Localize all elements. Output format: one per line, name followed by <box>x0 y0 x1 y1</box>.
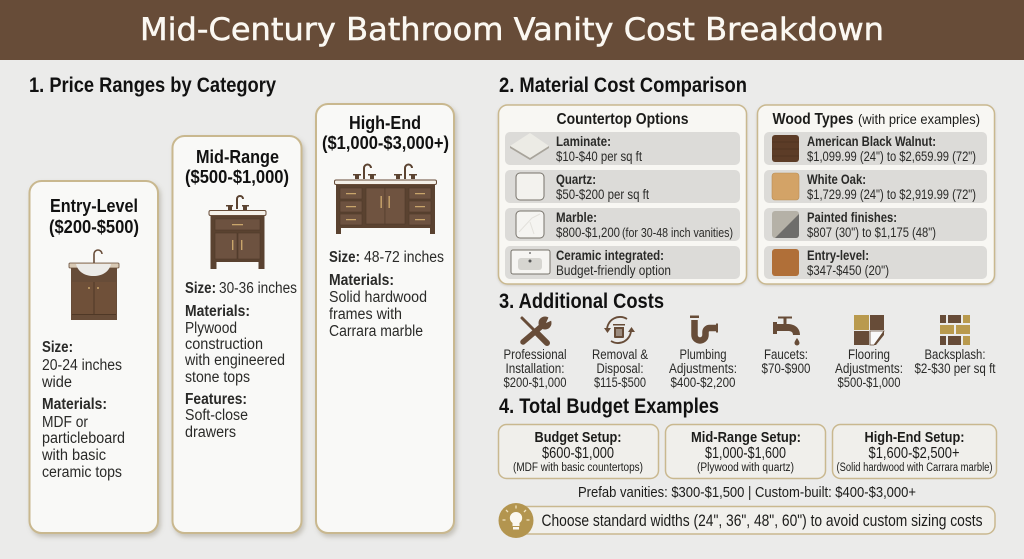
panel: budget setup: $600-$1,000 <box>542 445 614 462</box>
mid-range details: 30-36 inches <box>219 280 297 297</box>
entry-level heading <box>49 196 139 237</box>
panel: mid-range setup <box>666 424 826 478</box>
mid-range details: Plywood <box>185 320 237 337</box>
label: backsplash: $2-$30 per sq ft <box>914 361 996 376</box>
additional cost: plumbing adjustments <box>669 316 737 390</box>
label: flooring: $500-$1,000 <box>838 375 900 390</box>
mid-range details: Features: <box>185 391 247 408</box>
high-end heading <box>322 113 449 153</box>
high-end details: 48-72 inches <box>364 249 444 266</box>
panel: mid-range card <box>172 136 302 533</box>
panel: budget setup: (MDF with basic countertops) <box>513 462 643 474</box>
high-end details: frames with <box>329 306 402 323</box>
icon: floor tiles <box>854 315 884 345</box>
wood types heading: (with price examples) <box>858 111 980 127</box>
row: american black walnut <box>764 132 987 165</box>
mid-range heading <box>185 147 289 187</box>
high-end details <box>329 249 444 340</box>
swatch: walnut <box>772 135 799 162</box>
label: plumbing: Adjustments: <box>669 361 737 376</box>
high-end details: Carrara marble <box>329 323 423 340</box>
row: painted finishes <box>764 208 987 241</box>
section heading: total budget examples: 4. Total Budget Examples <box>499 395 719 418</box>
header banner <box>0 0 1024 60</box>
label: plumbing: Plumbing <box>680 347 726 362</box>
mid-range details: with engineered <box>184 352 285 369</box>
row: marble: Marble: <box>556 210 597 225</box>
mid-range details: Size: <box>185 280 216 297</box>
row: white oak: $1,729.99 (24") to $2,919.99 (72") <box>807 187 976 202</box>
row: laminate: $10-$40 per sq ft <box>556 149 642 164</box>
icon: faucet <box>773 316 800 346</box>
label: plumbing: $400-$2,200 <box>670 375 736 390</box>
swatch: painted <box>772 211 799 238</box>
label: plumbing <box>669 347 737 390</box>
icon: recycling trash bin <box>604 317 635 343</box>
panel: high-end setup: $1,600-$2,500+ <box>868 445 960 462</box>
icon: mid-range vanity <box>209 196 266 269</box>
label: faucets <box>762 347 810 376</box>
swatch: laminate <box>510 133 549 160</box>
label: installation: Professional <box>504 347 566 362</box>
panel: budget setup: Budget Setup: <box>534 429 622 446</box>
icon: double vanity <box>334 165 436 234</box>
additional cost: flooring adjustments <box>835 315 903 390</box>
label: backsplash: Backsplash: <box>924 347 986 362</box>
label: installation <box>504 347 566 390</box>
panel: budget setup <box>498 424 658 478</box>
icon: drain pipe <box>690 316 718 340</box>
countertop heading: Countertop Options <box>556 111 689 128</box>
high-end details: Solid hardwood <box>329 289 427 306</box>
row: marble: $800-$1,200 <box>556 225 620 240</box>
wood types heading <box>772 111 980 128</box>
row: quartz: Quartz: <box>556 172 596 187</box>
panel: mid-range setup: $1,000-$1,600 <box>705 445 786 462</box>
row: painted finishes: $807 (30") to $1,175 (48") <box>807 225 936 240</box>
row: entry-level wood: $347-$450 (20") <box>807 263 889 278</box>
additional cost: faucets <box>762 316 810 376</box>
entry-level details: MDF or <box>42 414 88 431</box>
icon: small vanity with basin <box>69 250 119 320</box>
high-end heading: High-End <box>349 113 421 133</box>
panel: entry-level card <box>30 181 158 533</box>
high-end details: Materials: <box>329 272 394 289</box>
high-end heading: ($1,000-$3,000+) <box>322 133 449 153</box>
row: quartz: $50-$200 per sq ft <box>556 187 649 202</box>
swatch: entry-level <box>772 249 799 276</box>
panel: high-end setup: High-End Setup: <box>864 429 964 446</box>
label: faucets: Faucets: <box>764 347 808 362</box>
swatch: ceramic <box>511 250 550 274</box>
row: ceramic integrated <box>505 246 740 279</box>
label: backsplash <box>914 347 996 376</box>
mid-range details: Materials: <box>185 303 250 320</box>
row: laminate: Laminate: <box>556 134 611 149</box>
row: ceramic integrated: Ceramic integrated: <box>556 248 664 263</box>
label: installation: Installation: <box>506 361 564 376</box>
row: entry-level wood <box>764 246 987 279</box>
section heading: price ranges: 1. Price Ranges by Category <box>29 74 276 97</box>
panel: wood types <box>758 105 994 284</box>
label: installation: $200-$1,000 <box>504 375 566 390</box>
swatch: white oak <box>772 173 799 200</box>
entry-level details: particleboard <box>42 430 125 447</box>
label: flooring: Adjustments: <box>835 361 903 376</box>
prefab versus custom note: Prefab vanities: $300-$1,500 | Custom-built: $400-$3,000+ <box>578 484 916 501</box>
section heading: additional costs: 3. Additional Costs <box>499 290 664 313</box>
swatch: quartz <box>516 173 544 200</box>
label: removal <box>592 347 648 390</box>
label: flooring <box>835 347 903 390</box>
entry-level details: 20-24 inches <box>42 357 122 374</box>
row: marble <box>505 208 740 241</box>
entry-level details <box>41 339 125 481</box>
label: flooring: Flooring <box>848 347 890 362</box>
mid-range details: drawers <box>185 424 236 441</box>
entry-level details: with basic <box>41 447 106 464</box>
mid-range heading: ($500-$1,000) <box>185 167 289 187</box>
mid-range details: Soft-close <box>185 407 248 424</box>
panel: countertop options <box>498 105 746 284</box>
entry-level heading: Entry-Level <box>50 196 138 216</box>
mid-range heading: Mid-Range <box>196 147 279 167</box>
mid-range details <box>184 280 297 441</box>
panel: high-end setup <box>832 424 996 478</box>
title: Mid-Century Bathroom Vanity Cost Breakdown <box>140 12 884 48</box>
entry-level details: Materials: <box>42 396 107 413</box>
panel: mid-range setup: (Plywood with quartz) <box>697 462 794 474</box>
row: white oak: White Oak: <box>807 172 866 187</box>
row: entry-level wood: Entry-level: <box>807 248 869 263</box>
section heading: material cost comparison: 2. Material Cost Comparison <box>499 74 747 97</box>
row: ceramic integrated: Budget-friendly option <box>556 263 671 278</box>
icon: wrench and screwdriver <box>522 314 555 343</box>
wood types heading: Wood Types <box>772 111 854 128</box>
label: removal: $115-$500 <box>594 375 646 390</box>
label: removal: Removal & <box>592 347 648 362</box>
row: white oak <box>764 170 987 203</box>
panel: high-end setup: (Solid hardwood with Carrara marble) <box>836 462 993 474</box>
additional cost: professional installation <box>504 314 566 390</box>
high-end details: Size: <box>329 249 360 266</box>
swatch: marble <box>516 211 544 238</box>
entry-level heading: ($200-$500) <box>49 217 139 237</box>
entry-level details: wide <box>41 374 72 391</box>
mid-range details: construction <box>185 336 263 353</box>
entry-level details: ceramic tops <box>42 464 122 481</box>
additional cost: removal and disposal <box>592 317 648 390</box>
panel: high-end card <box>316 104 454 533</box>
callout: standard widths tip <box>498 503 995 538</box>
row: marble: (for 30-48 inch vanities) <box>622 226 733 240</box>
row: painted finishes: Painted finishes: <box>807 210 897 225</box>
icon: brick backsplash <box>940 315 970 345</box>
panel: mid-range setup: Mid-Range Setup: <box>691 429 801 446</box>
label: removal: Disposal: <box>596 361 644 376</box>
mid-range details: stone tops <box>185 369 250 386</box>
entry-level details: Size: <box>42 339 73 356</box>
additional cost: backsplash <box>914 315 996 376</box>
label: faucets: $70-$900 <box>762 361 810 376</box>
row: american black walnut: American Black Walnut: <box>807 134 936 149</box>
row: laminate <box>505 132 740 165</box>
icon: light bulb <box>498 503 534 538</box>
row: american black walnut: $1,099.99 (24") to $2,659.99 (72") <box>807 149 976 164</box>
row: quartz <box>505 170 740 203</box>
